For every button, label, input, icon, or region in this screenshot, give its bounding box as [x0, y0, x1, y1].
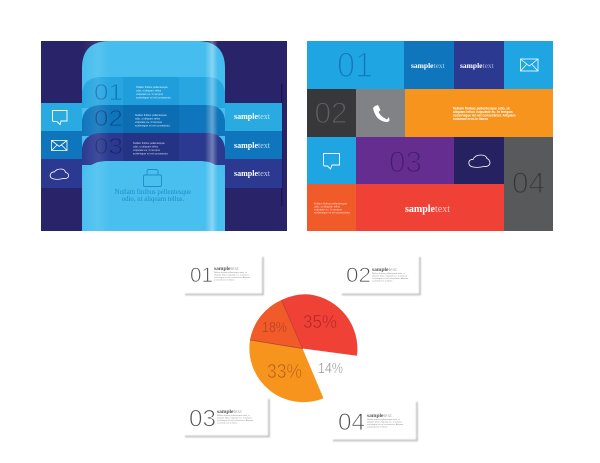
- step 01: vulputate eu. In tempus: [136, 92, 164, 96]
- slice: 33%: 33%: [267, 361, 302, 383]
- tile: orange text: [405, 89, 553, 137]
- tile: orange-red text: odio, ut aliquam tellus: [314, 204, 341, 208]
- label: sampletext 1: sampletext: [234, 112, 271, 121]
- label: 14%: 14%: [318, 360, 343, 377]
- card 03: [185, 399, 269, 436]
- tile: sampletext blue: sampletext: [411, 61, 446, 70]
- tile: cloud icon: [454, 137, 504, 184]
- step 02: vulputate eu. In tempus: [135, 120, 163, 124]
- card 02: scelerisque mi vel consectetur. Aliquam: [372, 277, 409, 280]
- tile: orange-red text: scelerisque mi vel consectetur.: [314, 210, 351, 214]
- icon: speech bubble: [52, 110, 67, 124]
- card 01: Nullam finibus pellentesque odio, ut: [214, 271, 247, 274]
- card 03: 03: [189, 406, 216, 432]
- step 02: [82, 105, 225, 136]
- step 03: scelerisque mi vel consectetur.: [133, 152, 169, 156]
- step 01: 01: [94, 79, 123, 105]
- card 04: sampletext: [367, 413, 392, 419]
- step 03: 03: [94, 133, 123, 159]
- tile: sampletext indigo: sampletext: [460, 61, 495, 70]
- step 03: Nullam finibus pellentesque: [133, 141, 165, 145]
- tile: red sampletext: [356, 184, 504, 231]
- card 04: euismod eros in libero: [367, 426, 388, 428]
- card 01: 01: [190, 263, 213, 287]
- tile 03: [356, 137, 454, 184]
- card 02: aliquam tellus vulputate eu. In tempus: [372, 274, 407, 278]
- central back card: [82, 41, 225, 231]
- card 04: [333, 402, 417, 440]
- tile: sampletext indigo: [454, 41, 504, 89]
- card 02: Nullam finibus pellentesque odio, ut: [372, 272, 405, 275]
- tile: orange-red text: [307, 184, 356, 231]
- card 03: Nullam finibus pellentesque odio, ut: [217, 414, 250, 417]
- step 02: 02: [94, 105, 123, 131]
- card 01: euismod eros in libero: [214, 278, 235, 282]
- front card text: Nullam finibus pellentesque: [115, 189, 191, 196]
- card 04: aliquam tellus vulputate eu. In tempus: [367, 420, 402, 424]
- icon: briefcase: [144, 170, 162, 186]
- tile: orange text: euismod eros in libero: [453, 117, 488, 121]
- tile: phone: [356, 89, 405, 137]
- card 04: 04: [338, 409, 365, 436]
- pie chart: [249, 294, 357, 402]
- slice: 18%: 18%: [262, 319, 287, 336]
- step 01: odio, ut aliquam tellus: [136, 88, 162, 92]
- card 04: scelerisque mi vel consectetur. Aliquam: [367, 423, 404, 426]
- tile 02: 02: [314, 97, 348, 130]
- card 02: sampletext: [372, 267, 397, 273]
- band: cloud row: [41, 159, 282, 188]
- card 02: [342, 257, 420, 294]
- card gloss: [82, 41, 225, 231]
- tile: orange text: Nullam finibus pellentesque odio, ut: [453, 106, 511, 110]
- step 01: scelerisque mi vel consectetur.: [136, 96, 172, 100]
- step 02: scelerisque mi vel consectetur.: [135, 124, 171, 128]
- step 03: vulputate eu. In tempus: [133, 148, 161, 152]
- front card text: odio, ut aliquam tellus.: [122, 196, 185, 203]
- card 01: scelerisque mi vel consectetur. Aliquam: [214, 276, 251, 279]
- tile 04: [504, 137, 553, 231]
- tile: sampletext blue: [404, 41, 454, 89]
- tile 04: 04: [512, 167, 545, 200]
- card 01: [185, 257, 263, 294]
- slice: 35%: 35%: [303, 312, 337, 332]
- tile 03: 03: [389, 146, 422, 179]
- card 03: sampletext: [217, 409, 242, 415]
- tile: mail icon: [504, 41, 553, 89]
- step 03: [82, 133, 225, 165]
- card 01: aliquam tellus vulputate eu. In tempus: [214, 274, 249, 276]
- tile 02: [307, 89, 356, 137]
- step 02: Nullam finibus pellentesque: [135, 113, 167, 117]
- icon: envelope: [52, 140, 67, 150]
- label: sampletext 2: sampletext: [234, 141, 271, 150]
- tile: orange-red text: Nullam finibus pellentesque: [314, 202, 347, 206]
- card 03: aliquam tellus vulputate eu. In tempus: [217, 416, 252, 420]
- step 01: [82, 77, 225, 108]
- band: mail row: [41, 131, 282, 159]
- card 02: 02: [346, 263, 371, 287]
- tile 01: 01: [337, 46, 373, 85]
- panel: blue layered infographic: [41, 41, 287, 231]
- card 03: scelerisque mi vel consectetur. Aliquam: [217, 419, 254, 422]
- card 04: Nullam finibus pellentesque odio, ut: [367, 418, 400, 421]
- card 01: sampletext: [214, 266, 239, 272]
- step 02: odio, ut aliquam tellus: [135, 116, 161, 120]
- slice divider: [250, 300, 302, 348]
- tile: red sampletext: sampletext: [405, 204, 450, 215]
- label: sampletext 3: sampletext: [234, 169, 271, 178]
- tile: orange-red text: vulputate eu. In tempus: [314, 208, 343, 212]
- icon: cloud: [50, 169, 69, 179]
- tile: orange text: aliquam tellus vulputate eu. In tempus: [453, 110, 513, 114]
- tile: orange text: scelerisque mi vel consectetur. Aliquam: [453, 114, 516, 118]
- card 03: euismod eros in libero: [217, 422, 238, 424]
- step 01: Nullam finibus pellentesque: [136, 85, 168, 89]
- card 02: euismod eros in libero: [372, 280, 393, 282]
- tile: speech icon: [307, 137, 356, 184]
- step 03: odio, ut aliquam tellus: [133, 144, 159, 148]
- band: speech row: [41, 103, 282, 131]
- tile 01: [307, 41, 404, 89]
- panel: colour tile grid: [307, 41, 553, 231]
- front card: [82, 161, 225, 231]
